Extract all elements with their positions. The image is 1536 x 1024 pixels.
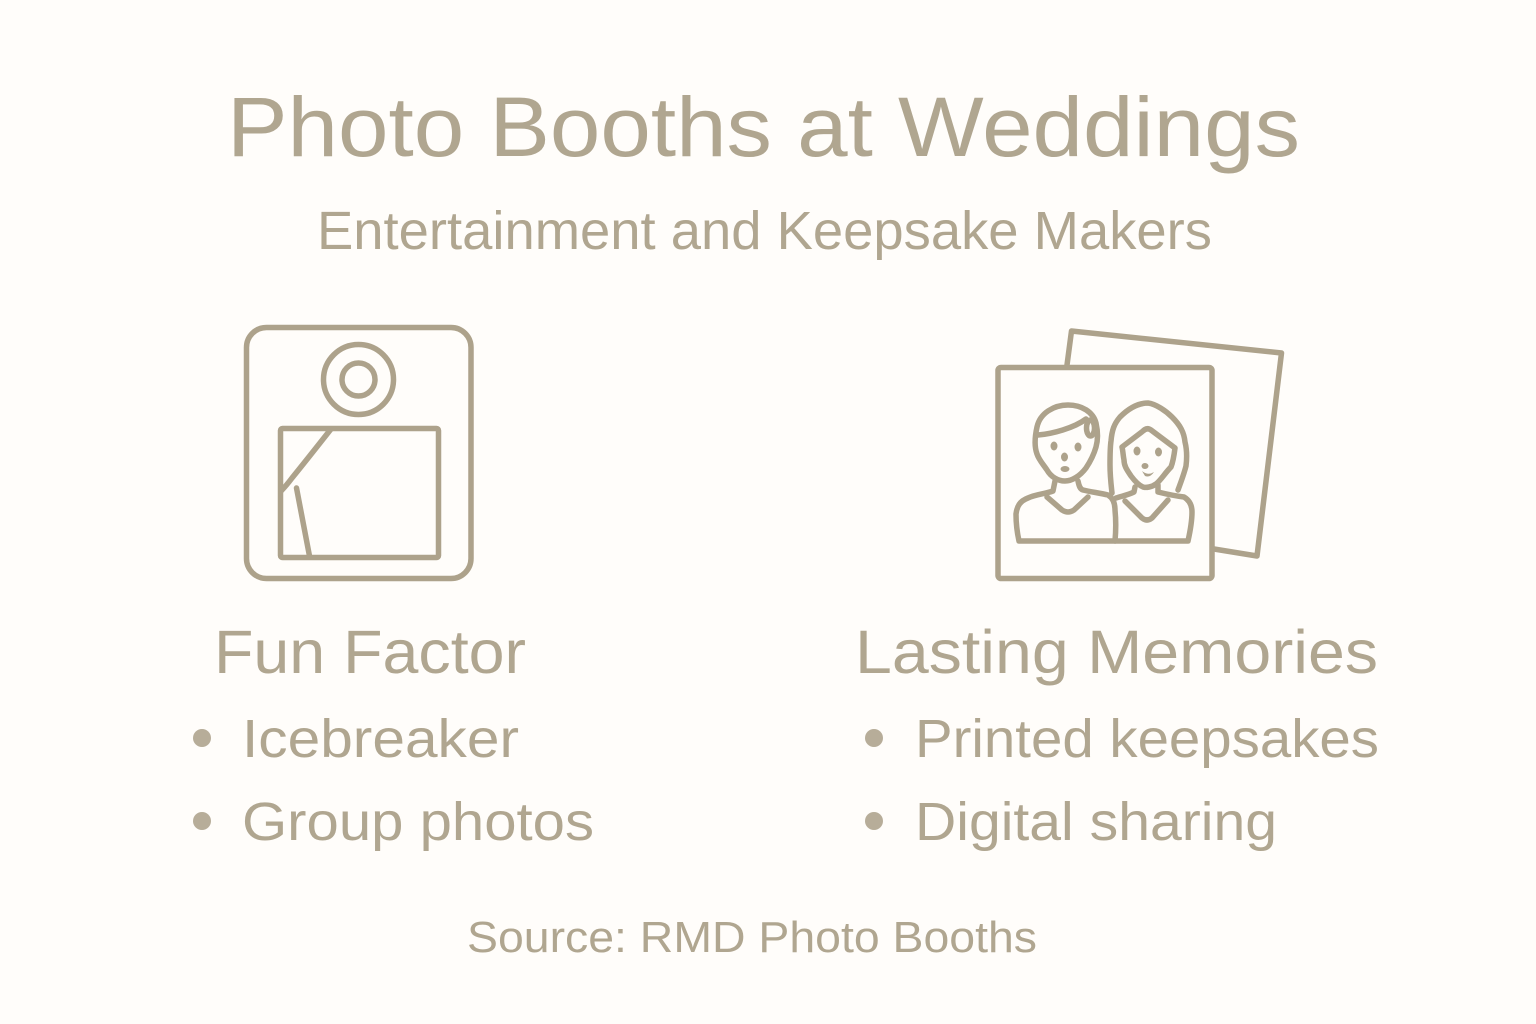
bullet list: fun factor: Icebreaker — [242, 709, 519, 769]
bullet list: lasting memories: Printed keepsakes — [915, 709, 1379, 769]
source note: Source: RMD Photo Booths — [467, 913, 1037, 962]
heading: lasting memories: Lasting Memories — [855, 618, 1378, 686]
bullet list: lasting memories — [865, 709, 1379, 852]
subtitle: Entertainment and Keepsake Makers — [317, 201, 1212, 261]
panel: lasting memories — [855, 331, 1379, 852]
heading: fun factor: Fun Factor — [214, 618, 526, 686]
icon: photo booth — [246, 328, 471, 578]
bullet list: fun factor: Group photos — [242, 792, 594, 852]
icon: couple photo prints — [998, 331, 1282, 578]
panel: fun factor — [193, 328, 594, 852]
bullet list: fun factor — [193, 709, 594, 852]
icon: faces — [1050, 442, 1162, 476]
bullet list: lasting memories: Digital sharing — [915, 792, 1277, 852]
title: Photo Booths at Weddings — [227, 80, 1300, 174]
